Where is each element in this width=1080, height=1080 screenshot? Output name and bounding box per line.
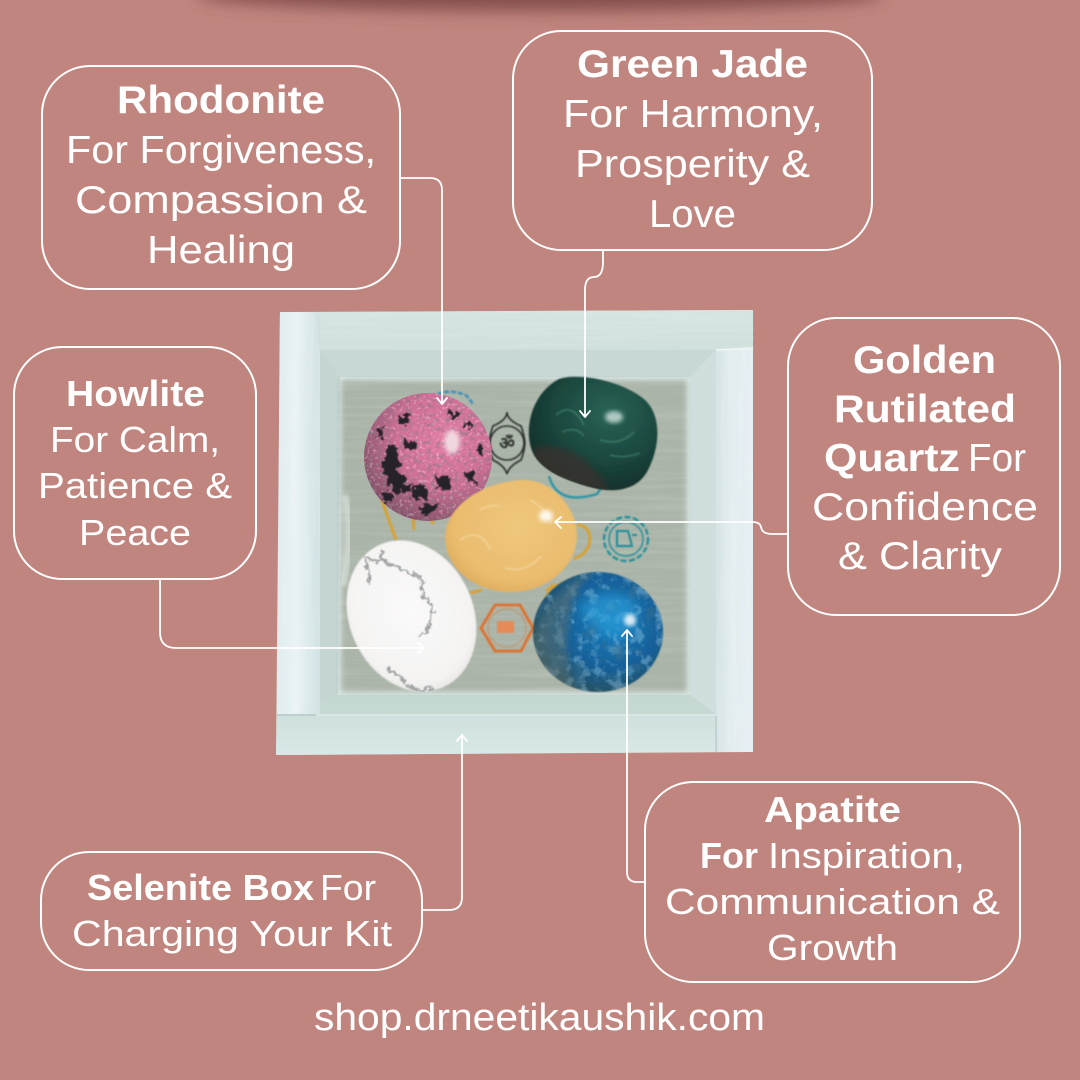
callout: apatite: Inspiration, [768, 835, 965, 876]
icon: orange sacral chakra pieces [381, 498, 590, 604]
callout: apatite: For [700, 835, 758, 876]
arrow: apatite connector [622, 630, 645, 882]
callout: rhodonite: For Forgiveness, [66, 129, 376, 172]
callout: green jade: Prosperity & [575, 143, 810, 186]
callout: rhodonite: Compassion & [75, 179, 367, 222]
callout: howlite: Howlite [66, 373, 205, 414]
callout: howlite: Patience & [38, 465, 232, 506]
arrow: green jade connector [580, 250, 603, 417]
stone: apatite [533, 572, 663, 692]
callout: apatite [645, 782, 1020, 982]
callout: howlite: Peace [79, 512, 191, 553]
arrow: golden quartz connector [555, 517, 788, 534]
callout: golden rutilated quartz: Rutilated [834, 388, 1016, 431]
callout: selenite box: Charging Your Kit [72, 913, 392, 954]
callout: rhodonite [42, 66, 400, 289]
arrow: howlite connector [160, 579, 424, 653]
icon: black crown chakra: ॐ [499, 434, 515, 453]
callout: howlite [14, 347, 256, 579]
stone: howlite [346, 540, 478, 692]
icon: partial teal chakra below jade [549, 476, 601, 497]
callout: apatite: Growth [767, 927, 898, 968]
callout: golden rutilated quartz: Golden [853, 339, 996, 382]
icon: orange root chakra [481, 605, 533, 651]
callout: rhodonite: Healing [147, 229, 295, 272]
callout: rhodonite: Rhodonite [117, 79, 325, 122]
selenite box photo [276, 310, 754, 755]
stone: golden rutilated quartz [445, 480, 577, 592]
arrow: selenite box connector [422, 735, 467, 910]
callout: golden rutilated quartz: Quartz [824, 437, 960, 480]
callout: green jade: Green Jade [577, 43, 808, 86]
callout: golden rutilated quartz: Confidence [812, 486, 1038, 529]
icon: partial blue throat chakra [431, 392, 473, 404]
callout: golden rutilated quartz: For [968, 437, 1026, 480]
callout: selenite box [41, 852, 422, 970]
callout: green jade: Love [649, 193, 736, 236]
stone: rhodonite [364, 393, 492, 521]
stone: green jade [529, 377, 657, 492]
website url: shop.drneetikaushik.com [314, 997, 765, 1039]
arrow: rhodonite connector [400, 178, 447, 404]
callout: selenite box: For [320, 867, 376, 908]
chakra symbols on the box floor [381, 392, 648, 651]
callout: green jade: For Harmony, [563, 93, 823, 136]
callout: apatite: Communication & [665, 881, 1000, 922]
callout: selenite box: Selenite Box [87, 867, 314, 908]
icon: black crown chakra [489, 412, 525, 474]
callout: howlite: For Calm, [50, 419, 220, 460]
callout: golden rutilated quartz [788, 318, 1060, 615]
top shadow band [195, 0, 885, 11]
icon: teal heart chakra [604, 517, 648, 561]
callout: apatite: Apatite [764, 789, 901, 830]
callout: golden rutilated quartz: & Clarity [838, 535, 1003, 578]
callout: green jade [513, 31, 872, 250]
